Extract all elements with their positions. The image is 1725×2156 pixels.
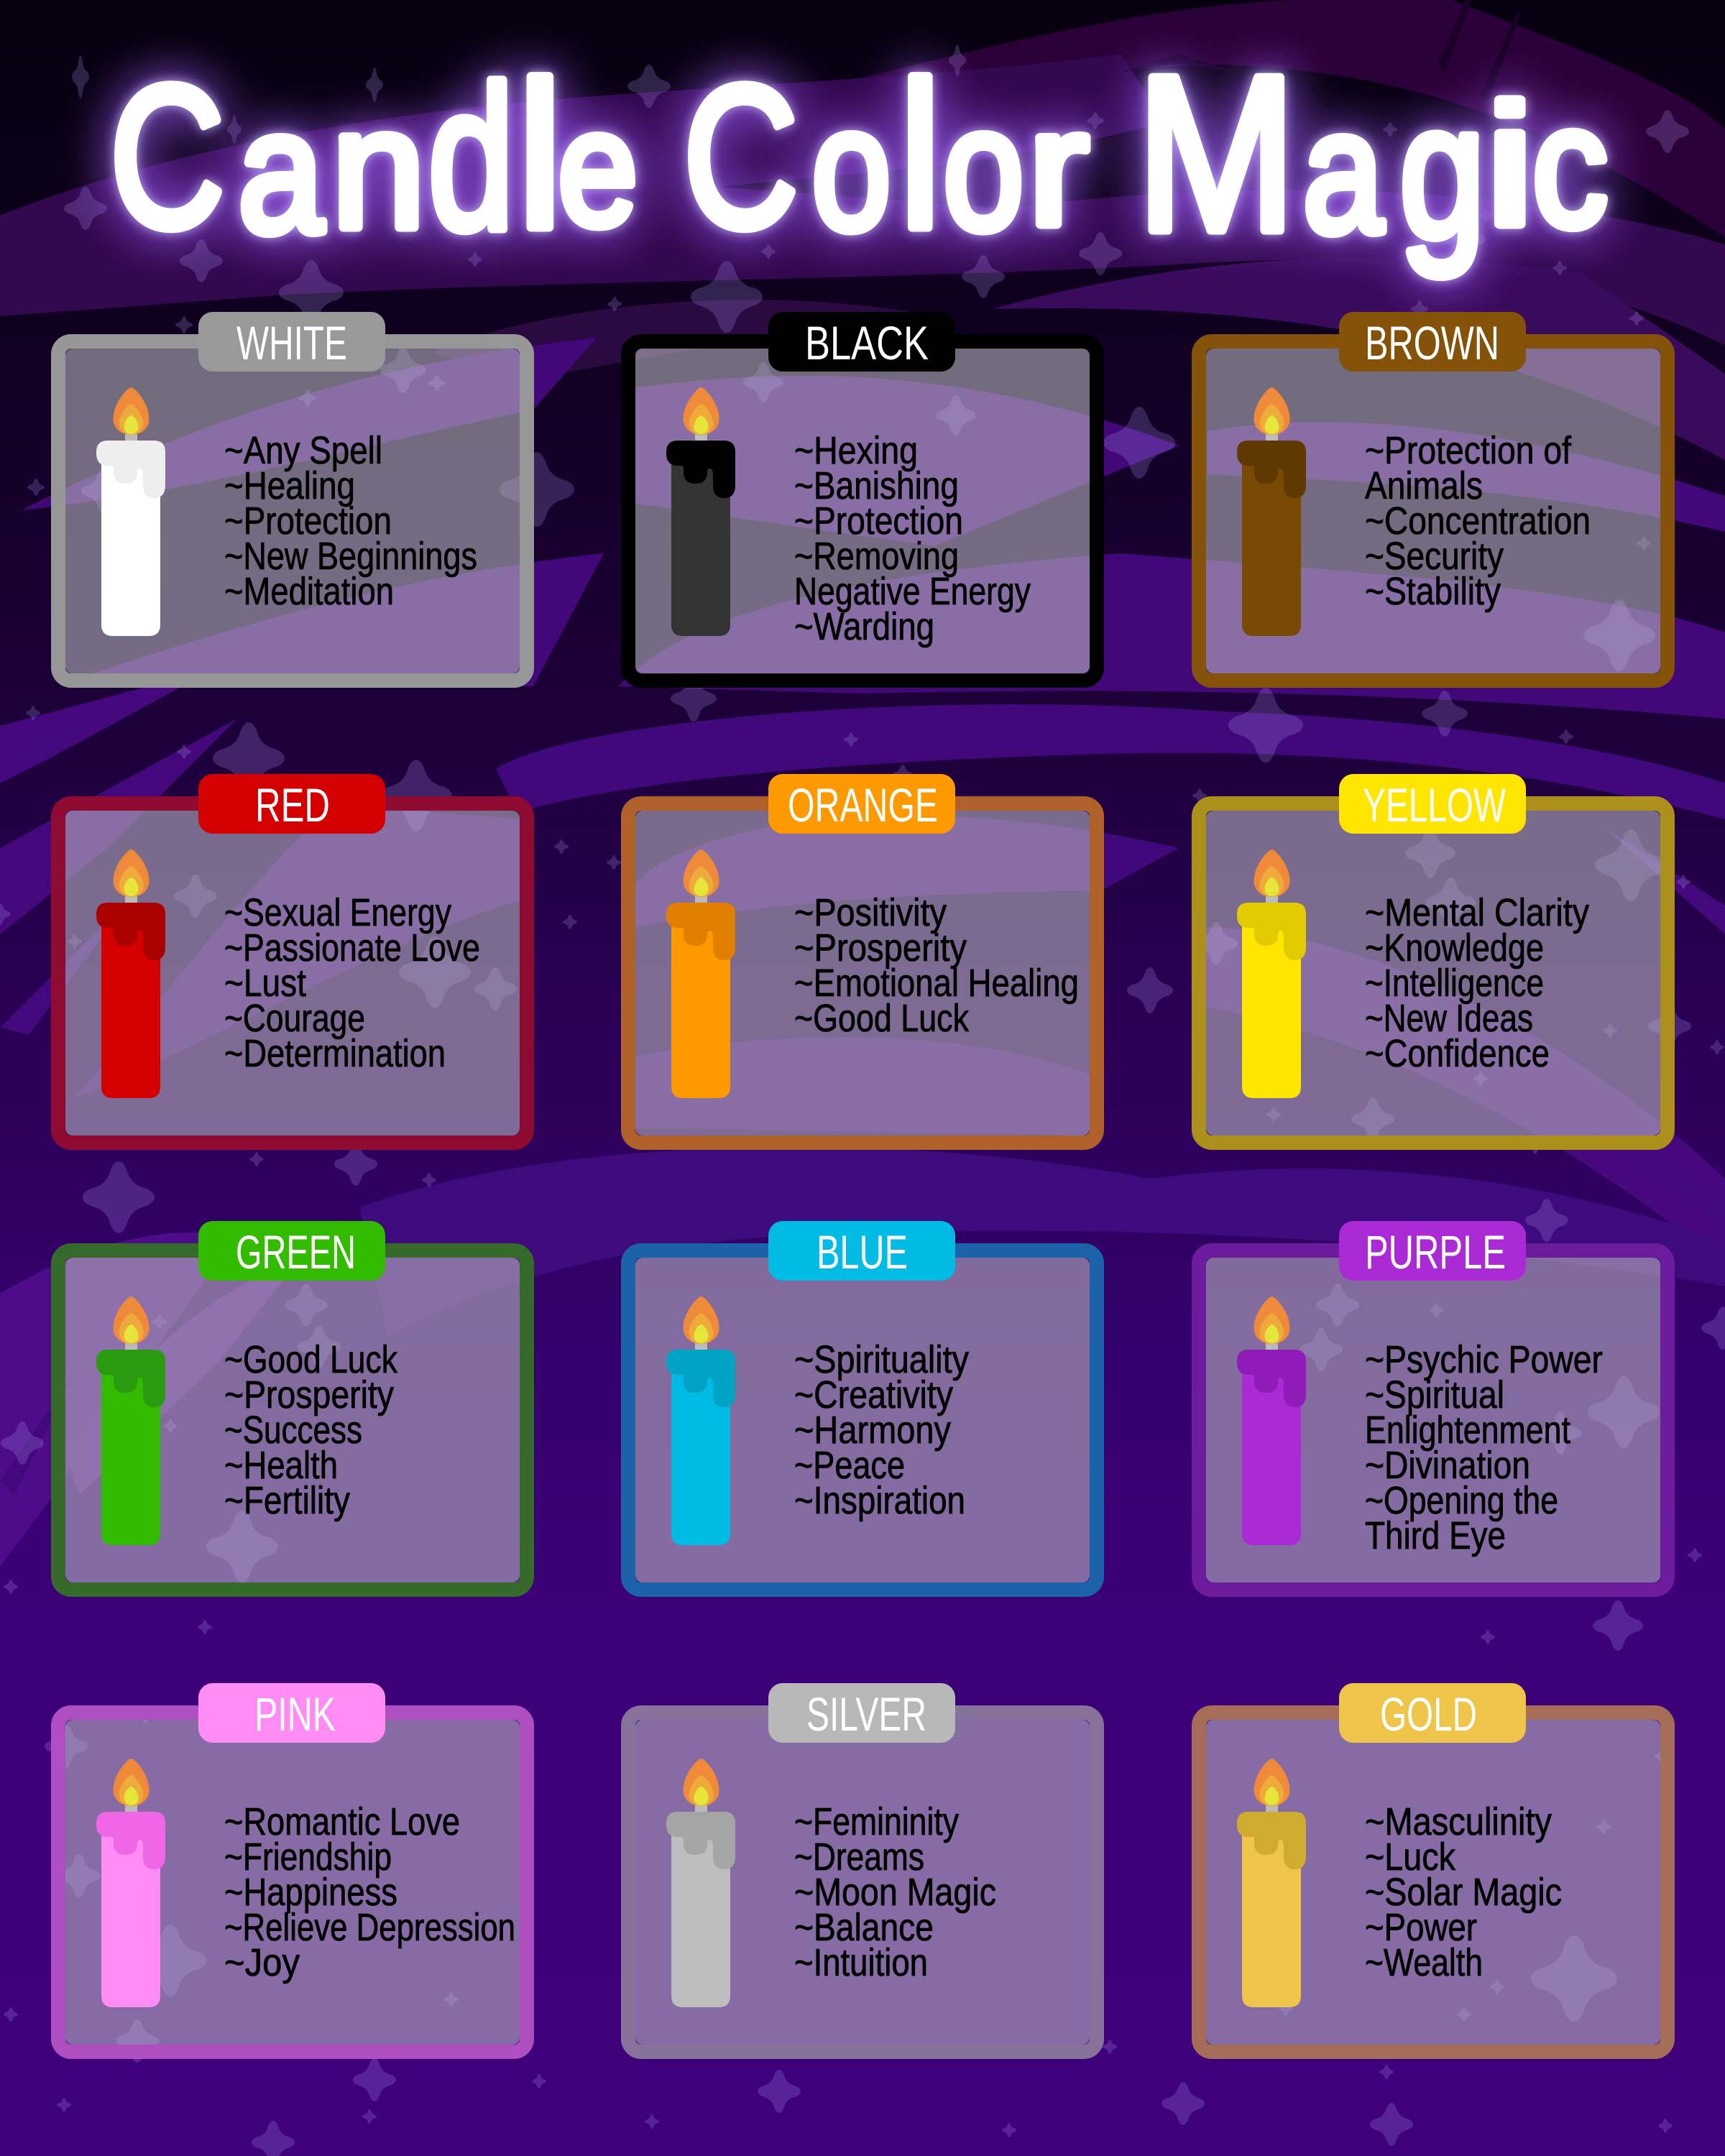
title: o xyxy=(943,70,1024,267)
list: brown: ~Concentration xyxy=(1365,499,1591,543)
list: red: ~Sexual Energy xyxy=(224,891,451,934)
list: orange: ~Emotional Healing xyxy=(794,962,1079,1005)
tab: gold xyxy=(1339,1683,1526,1743)
tab: brown: BROWN xyxy=(1365,316,1499,369)
panel: brown xyxy=(1199,312,1668,681)
list: pink: ~Happiness xyxy=(224,1871,397,1914)
title: a xyxy=(1303,74,1384,269)
list: green: ~Good Luck xyxy=(224,1338,398,1381)
list: black: Negative Energy xyxy=(794,570,1031,613)
list: red xyxy=(224,891,480,1075)
panel: blue xyxy=(628,1221,1097,1590)
candle: white xyxy=(96,387,165,636)
list: white: ~New Beginnings xyxy=(224,535,477,578)
list: purple: ~Opening the xyxy=(1365,1479,1558,1522)
list: blue: ~Inspiration xyxy=(794,1479,965,1522)
panel: orange xyxy=(628,774,1097,1143)
list: purple: Third Eye xyxy=(1365,1514,1506,1557)
list: red: ~Determination xyxy=(224,1032,446,1075)
list: white: ~Healing xyxy=(224,464,355,507)
tab: yellow: YELLOW xyxy=(1363,778,1506,831)
tab: orange xyxy=(768,774,955,834)
panel: white xyxy=(58,312,527,681)
list: green: ~Success xyxy=(224,1409,362,1452)
candle: blue xyxy=(666,1296,735,1545)
candle: green xyxy=(96,1296,165,1545)
list: green: ~Fertility xyxy=(224,1479,350,1522)
list: brown: ~Protection of xyxy=(1365,429,1572,472)
list: black xyxy=(794,429,1031,648)
list: yellow: ~New Ideas xyxy=(1365,997,1533,1040)
tab: yellow xyxy=(1339,774,1526,834)
candle: pink xyxy=(96,1759,165,2007)
list: blue: ~Creativity xyxy=(794,1373,953,1416)
tab: purple xyxy=(1339,1221,1526,1281)
list: pink: ~Friendship xyxy=(224,1835,392,1879)
title: C xyxy=(684,44,798,270)
list: black: ~Warding xyxy=(794,605,934,648)
list: silver: ~Dreams xyxy=(794,1835,924,1879)
panel: black xyxy=(628,312,1097,681)
list: brown: ~Security xyxy=(1365,535,1504,578)
panel: green xyxy=(58,1221,527,1590)
list: blue: ~Peace xyxy=(794,1444,905,1487)
title: e xyxy=(558,76,638,260)
list: black: ~Removing xyxy=(794,535,959,578)
list: white xyxy=(224,429,477,613)
panel: red xyxy=(58,774,527,1143)
panel: pink xyxy=(58,1683,527,2052)
list: yellow xyxy=(1365,891,1589,1075)
tab: blue: BLUE xyxy=(816,1225,908,1279)
title: d xyxy=(428,44,514,272)
candle: black xyxy=(666,387,735,636)
list: red: ~Lust xyxy=(224,962,306,1005)
tab: silver xyxy=(768,1683,955,1743)
title: l xyxy=(518,40,563,272)
list: blue xyxy=(794,1338,969,1522)
candle: purple xyxy=(1237,1296,1306,1545)
list: pink: ~Relieve Depression xyxy=(224,1906,515,1949)
list: gold: ~Wealth xyxy=(1365,1941,1483,1984)
list: silver: ~Femininity xyxy=(794,1800,959,1843)
title: C xyxy=(110,44,224,270)
title: i xyxy=(1486,69,1535,261)
candle: brown xyxy=(1237,387,1306,636)
tab: pink: PINK xyxy=(254,1687,336,1741)
tab: black xyxy=(768,312,955,372)
panel: silver xyxy=(628,1683,1097,2052)
list: yellow: ~Mental Clarity xyxy=(1365,891,1589,934)
list: yellow: ~Intelligence xyxy=(1365,962,1544,1005)
list: brown xyxy=(1365,429,1591,613)
list: blue: ~Spirituality xyxy=(794,1338,969,1381)
list: blue: ~Harmony xyxy=(794,1409,951,1452)
list: green: ~Health xyxy=(224,1444,338,1487)
tab: red: RED xyxy=(255,778,330,831)
list: gold: ~Solar Magic xyxy=(1365,1871,1562,1914)
list: red: ~Courage xyxy=(224,997,365,1040)
title: l xyxy=(899,40,941,272)
list: silver: ~Balance xyxy=(794,1906,934,1949)
title xyxy=(110,30,1608,279)
list: purple xyxy=(1365,1338,1603,1557)
list: orange: ~Positivity xyxy=(794,891,947,934)
list: pink: ~Joy xyxy=(224,1941,300,1984)
list: gold: ~Luck xyxy=(1365,1835,1456,1879)
tab: white xyxy=(198,312,385,372)
tab: silver: SILVER xyxy=(806,1687,926,1741)
tab: red xyxy=(198,774,385,834)
list: gold: ~Power xyxy=(1365,1906,1477,1949)
tab: blue xyxy=(768,1221,955,1281)
tab: purple: PURPLE xyxy=(1365,1225,1506,1279)
list: black: ~Protection xyxy=(794,499,963,543)
list: gold xyxy=(1365,1800,1562,1984)
title: r xyxy=(1029,77,1088,259)
list: black: ~Hexing xyxy=(794,429,918,472)
title: c xyxy=(1532,69,1608,263)
tab: black: BLACK xyxy=(805,316,929,369)
tab: white: WHITE xyxy=(236,316,347,369)
list: gold: ~Masculinity xyxy=(1365,1800,1552,1843)
candle: gold xyxy=(1237,1759,1306,2007)
list: yellow: ~Confidence xyxy=(1365,1032,1550,1075)
panel: yellow xyxy=(1199,774,1668,1143)
list: silver: ~Moon Magic xyxy=(794,1871,996,1914)
candle: red xyxy=(96,849,165,1098)
tab: green: GREEN xyxy=(236,1225,356,1279)
title: g xyxy=(1399,65,1485,279)
list: purple: Enlightenment xyxy=(1365,1409,1570,1452)
title: o xyxy=(812,70,891,267)
list: brown: Animals xyxy=(1365,464,1483,507)
list: orange: ~Good Luck xyxy=(794,997,970,1040)
tab: pink xyxy=(198,1683,385,1743)
tab: green xyxy=(198,1221,385,1281)
list: purple: ~Psychic Power xyxy=(1365,1338,1603,1381)
panel: purple xyxy=(1199,1221,1668,1590)
panel: gold xyxy=(1199,1683,1668,2052)
list: silver: ~Intuition xyxy=(794,1941,928,1984)
list: red: ~Passionate Love xyxy=(224,926,480,969)
list: yellow: ~Knowledge xyxy=(1365,926,1544,969)
list: purple: ~Spiritual xyxy=(1365,1373,1504,1416)
tab: brown xyxy=(1339,312,1526,372)
list: white: ~Protection xyxy=(224,499,392,543)
list: purple: ~Divination xyxy=(1365,1444,1530,1487)
candle: orange xyxy=(666,849,735,1098)
candle: silver xyxy=(666,1759,735,2007)
list: white: ~Meditation xyxy=(224,570,394,613)
list: silver xyxy=(794,1800,996,1984)
title: M xyxy=(1136,30,1296,277)
tab: orange: ORANGE xyxy=(788,778,938,831)
list: brown: ~Stability xyxy=(1365,570,1501,613)
list: pink xyxy=(224,1800,515,1984)
list: orange: ~Prosperity xyxy=(794,926,967,969)
list: pink: ~Romantic Love xyxy=(224,1800,460,1843)
title: n xyxy=(332,73,425,264)
list: white: ~Any Spell xyxy=(224,429,382,472)
title: a xyxy=(238,74,324,269)
candle: yellow xyxy=(1237,849,1306,1098)
list: green: ~Prosperity xyxy=(224,1373,394,1416)
list: green xyxy=(224,1338,398,1522)
list: black: ~Banishing xyxy=(794,464,959,507)
list: orange xyxy=(794,891,1079,1040)
tab: gold: GOLD xyxy=(1380,1687,1477,1741)
